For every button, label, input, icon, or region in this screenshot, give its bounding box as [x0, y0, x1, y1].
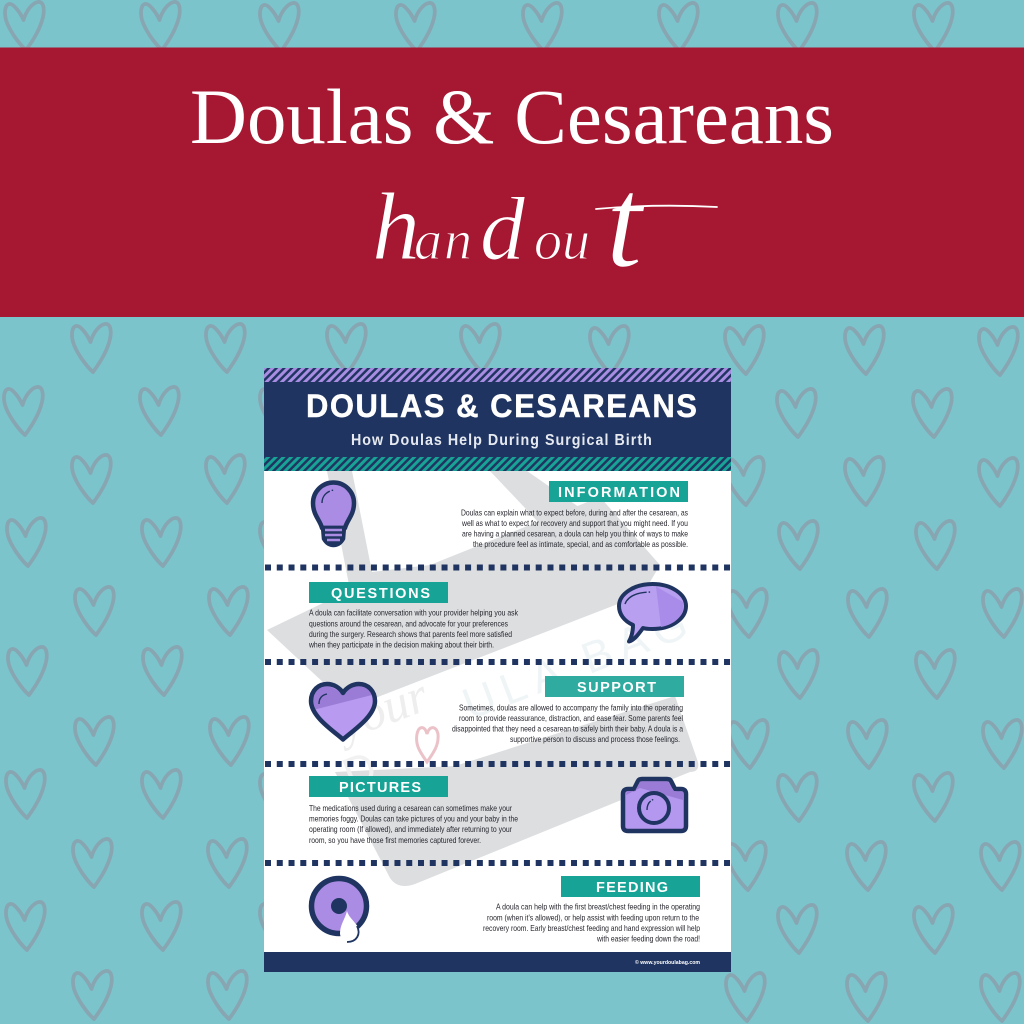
pictures text: memories foggy. Doulas can take pictures of you and your baby in the [309, 814, 518, 824]
questions text: questions around the cesarean, and advocate for your preferences [309, 618, 508, 628]
icon: speech bubble [619, 584, 686, 642]
feeding text: recovery room. Early breast/chest feeding and hand expression will help [483, 923, 700, 933]
section: information [313, 481, 688, 549]
questions label: QUESTIONS [331, 586, 430, 602]
information text: the procedure feel as intimate, special, and as comfortable as possible. [473, 539, 688, 549]
feeding label [561, 876, 700, 897]
handout sheet [264, 368, 731, 972]
sheet title: DOULAS & CESAREANS [306, 387, 697, 424]
pictures label [309, 776, 448, 797]
support text: disappointed that they need a cesarean to safely birth their baby. A doula is a [452, 723, 683, 733]
questions text: during the surgery. Research shows that parents feel more satisfied [309, 629, 512, 639]
script subtitle: n [444, 210, 472, 272]
section: pictures [309, 776, 686, 845]
support text: supportive person to discuss and process those feelings. [510, 734, 680, 744]
icon: lightbulb [313, 483, 354, 546]
support text: room to provide reassurance, distraction, and ease fear. Some parents feel [459, 713, 683, 723]
icon: breast with milk drop [312, 878, 366, 943]
section: questions [308, 582, 686, 650]
script subtitle [372, 151, 717, 295]
questions text: when they participate in the decision making about their birth. [308, 640, 494, 650]
sheet subtitle: How Doulas Help During Surgical Birth [351, 433, 652, 449]
icon: camera [623, 779, 686, 831]
script subtitle: u [562, 210, 590, 272]
feeding label: FEEDING [596, 880, 668, 896]
watermark: your [325, 666, 435, 752]
pictures text [309, 803, 518, 845]
pictures text: operating room (If allowed), and immediately after returning to your [309, 824, 512, 834]
information text: Doulas can explain what to expect before, during and after the cesarean, as [461, 508, 688, 518]
feeding text [483, 902, 700, 944]
purple stripe band [264, 368, 731, 382]
pictures text: room, so you have those first memories captured forever. [309, 835, 481, 845]
feeding text: A doula can help with the first breast/chest feeding in the operating [496, 902, 700, 912]
information label [549, 481, 688, 502]
sheet header [264, 382, 731, 457]
pictures text: The medications used during a cesarean can sometimes make your [309, 803, 512, 813]
watermark: D [336, 739, 391, 799]
watermark [267, 471, 702, 886]
questions label [309, 582, 448, 603]
information label: INFORMATION [558, 485, 680, 501]
icon: heart [311, 684, 375, 740]
teal stripe band [264, 457, 731, 471]
pictures label: PICTURES [339, 780, 421, 796]
feeding text: room (when it's allowed), or help assist with feeding upon return to the [487, 912, 699, 922]
section: support [311, 676, 684, 744]
script subtitle: a [414, 210, 442, 272]
information text: well as what to expect for recovery and support that you might need. If you [461, 518, 688, 528]
support text [452, 702, 683, 744]
copyright: © www.yourdoulabag.com [635, 959, 700, 966]
footer [264, 952, 731, 972]
script subtitle: d [480, 180, 526, 279]
banner [0, 48, 1024, 317]
information text: are having a planned cesarean, a doula can help you think of ways to make [462, 529, 688, 539]
support text: Sometimes, doulas are allowed to accompany the family into the operating [459, 702, 683, 712]
script subtitle: h [372, 173, 420, 280]
information text [461, 508, 688, 549]
support label [545, 676, 684, 697]
watermark: ULA BAG [456, 596, 702, 729]
script subtitle: o [534, 210, 562, 272]
section: feeding [312, 876, 700, 944]
support label: SUPPORT [577, 680, 656, 696]
questions text [308, 608, 519, 650]
questions text: A doula can facilitate conversation with your provider helping you ask [309, 608, 519, 618]
feeding text: with easier feeding down the road! [596, 934, 700, 944]
script subtitle: t [606, 151, 645, 295]
title: Doulas & Cesareans [190, 73, 834, 160]
